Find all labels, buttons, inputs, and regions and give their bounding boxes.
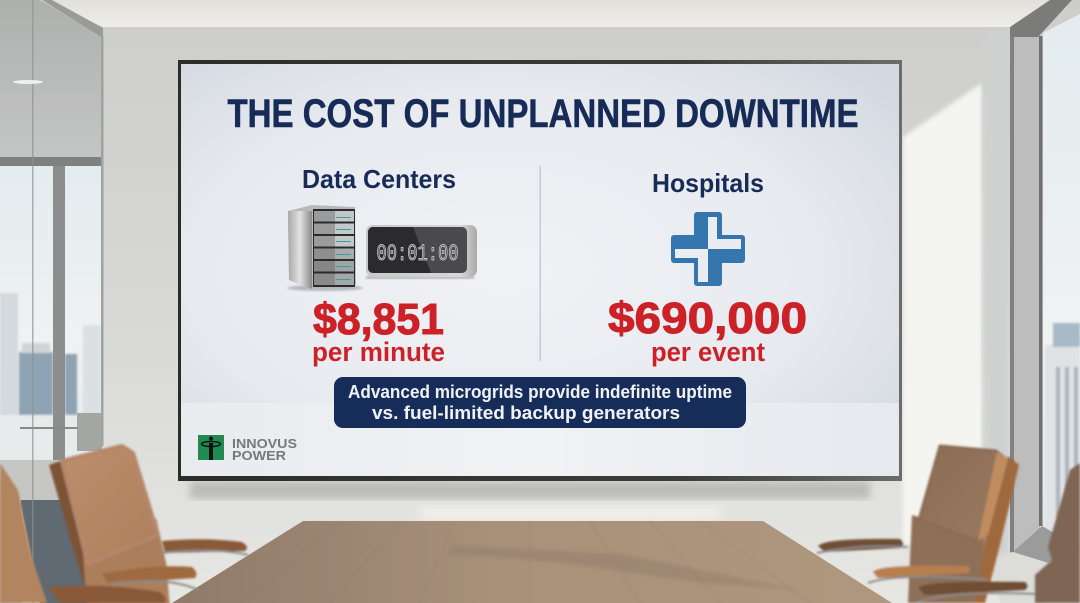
- clock digits: 00:01:00: [376, 241, 458, 267]
- display screen: [178, 60, 902, 481]
- callout: vs. fuel-limited backup generators: [372, 403, 680, 423]
- screen shadow on wall: [190, 481, 870, 499]
- chair lower back: [84, 520, 168, 603]
- light patch above table: [420, 506, 720, 520]
- stat: $690,000: $690,000: [608, 294, 807, 343]
- callout: [334, 377, 746, 428]
- left chair: [48, 446, 248, 603]
- chair upper back: [62, 446, 158, 564]
- right window: [990, 0, 1080, 603]
- skyline left: [0, 293, 101, 460]
- logo: Innovus Power: [198, 435, 297, 463]
- armrests: [818, 539, 903, 552]
- panel: data centers: [287, 164, 477, 367]
- conference table: [172, 521, 892, 603]
- callout: Advanced microgrids provide indefinite uptime: [348, 382, 732, 402]
- title: THE COST OF UNPLANNED DOWNTIME: [228, 92, 858, 136]
- logo: Innovus Power: INNOVUS: [232, 436, 297, 451]
- stat: $8,851: $8,851: [313, 295, 444, 344]
- icon: logo mark: [198, 435, 224, 460]
- skyline right: [1045, 323, 1080, 545]
- panel: hospitals: [608, 168, 807, 367]
- stat unit: per event: per event: [651, 337, 765, 367]
- chair lower back: [908, 515, 985, 603]
- icon: digital clock: [366, 225, 477, 279]
- logo: Innovus Power: POWER: [232, 448, 287, 463]
- far left chair: [0, 463, 47, 603]
- far right chair: [1035, 463, 1080, 603]
- right chair: [817, 446, 1036, 603]
- icon: medical cross: [671, 212, 745, 286]
- stat unit: per minute: per minute: [312, 337, 445, 367]
- chair frame: [49, 461, 103, 603]
- icon: server rack: [287, 205, 363, 291]
- chair frame: [975, 456, 1019, 603]
- screen surface: [181, 64, 899, 476]
- lower band: [181, 403, 899, 476]
- chair upper back: [919, 446, 1007, 540]
- heading: hospitals: Hospitals: [652, 168, 764, 198]
- heading: data centers: Data Centers: [302, 164, 456, 194]
- left glass partition and window: [0, 0, 104, 603]
- screen frame: [178, 60, 902, 481]
- armrests: [162, 539, 247, 553]
- divider: [540, 166, 541, 361]
